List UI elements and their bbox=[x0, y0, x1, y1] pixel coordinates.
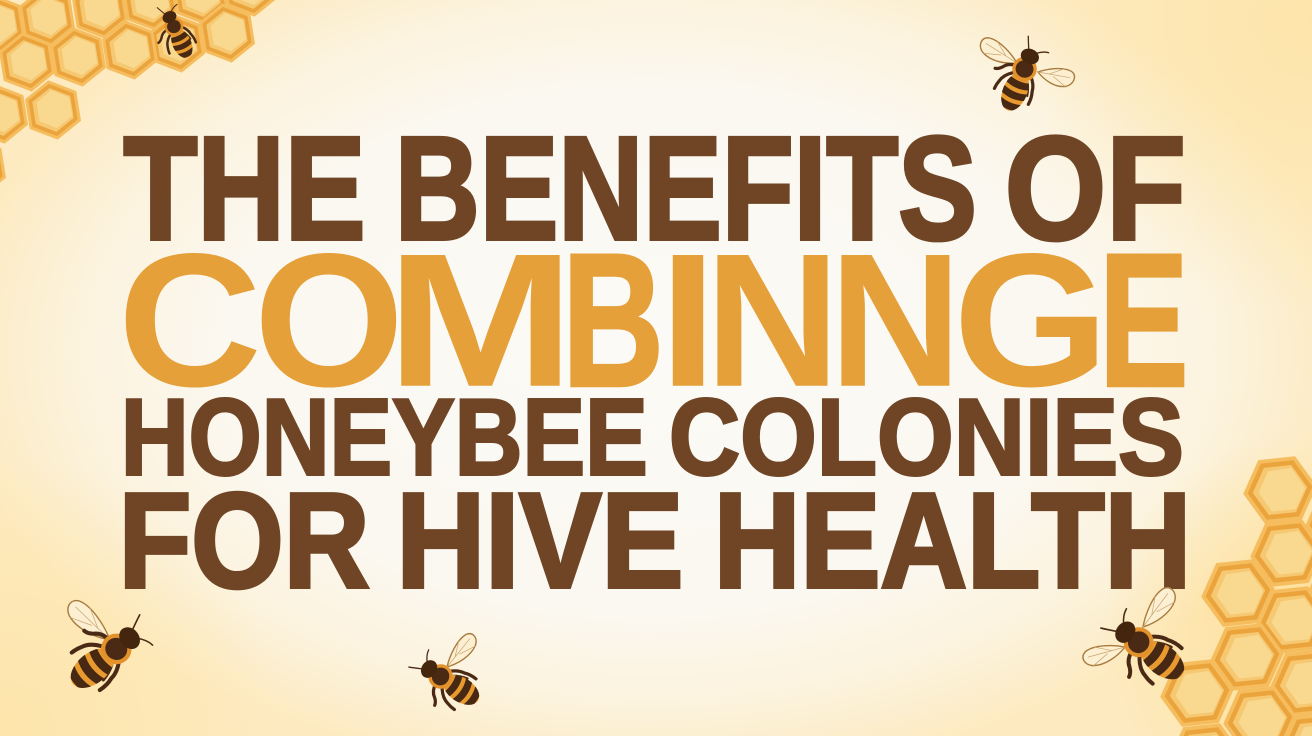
title line 1: BENEFITS bbox=[395, 107, 977, 271]
title line 2: O bbox=[254, 215, 404, 427]
honeycomb: bottom-right corner bbox=[1150, 440, 1312, 736]
title bbox=[118, 107, 1191, 616]
title line 2: C bbox=[118, 215, 262, 427]
icon: bee, bottom-right bbox=[1080, 584, 1195, 702]
title line 1: THE bbox=[124, 107, 366, 271]
icon: bee, top-right bbox=[977, 29, 1077, 117]
title line 2: N bbox=[829, 215, 962, 427]
honeycomb: top-left corner bbox=[0, 0, 290, 200]
title line 2: M bbox=[386, 215, 575, 427]
title line 1: OF bbox=[1005, 107, 1186, 271]
icon: bee, bottom-left bbox=[51, 597, 161, 701]
title line 4: HEALTH bbox=[714, 465, 1191, 616]
title line 2: B bbox=[562, 215, 664, 427]
title line 2: N bbox=[705, 215, 840, 427]
title line 2: I bbox=[659, 215, 717, 427]
icon: bee, bottom-centre bbox=[399, 631, 488, 724]
title line 4: HIVE bbox=[396, 465, 683, 616]
title line 4: FOR bbox=[119, 465, 370, 616]
title line 2: G bbox=[953, 215, 1109, 427]
icon: bee on honeycomb, top-left bbox=[145, 0, 200, 66]
title line 3: COLONIES bbox=[669, 376, 1184, 498]
title line 3: HONEYBEE bbox=[121, 376, 648, 498]
title line 2: E bbox=[1099, 215, 1188, 427]
